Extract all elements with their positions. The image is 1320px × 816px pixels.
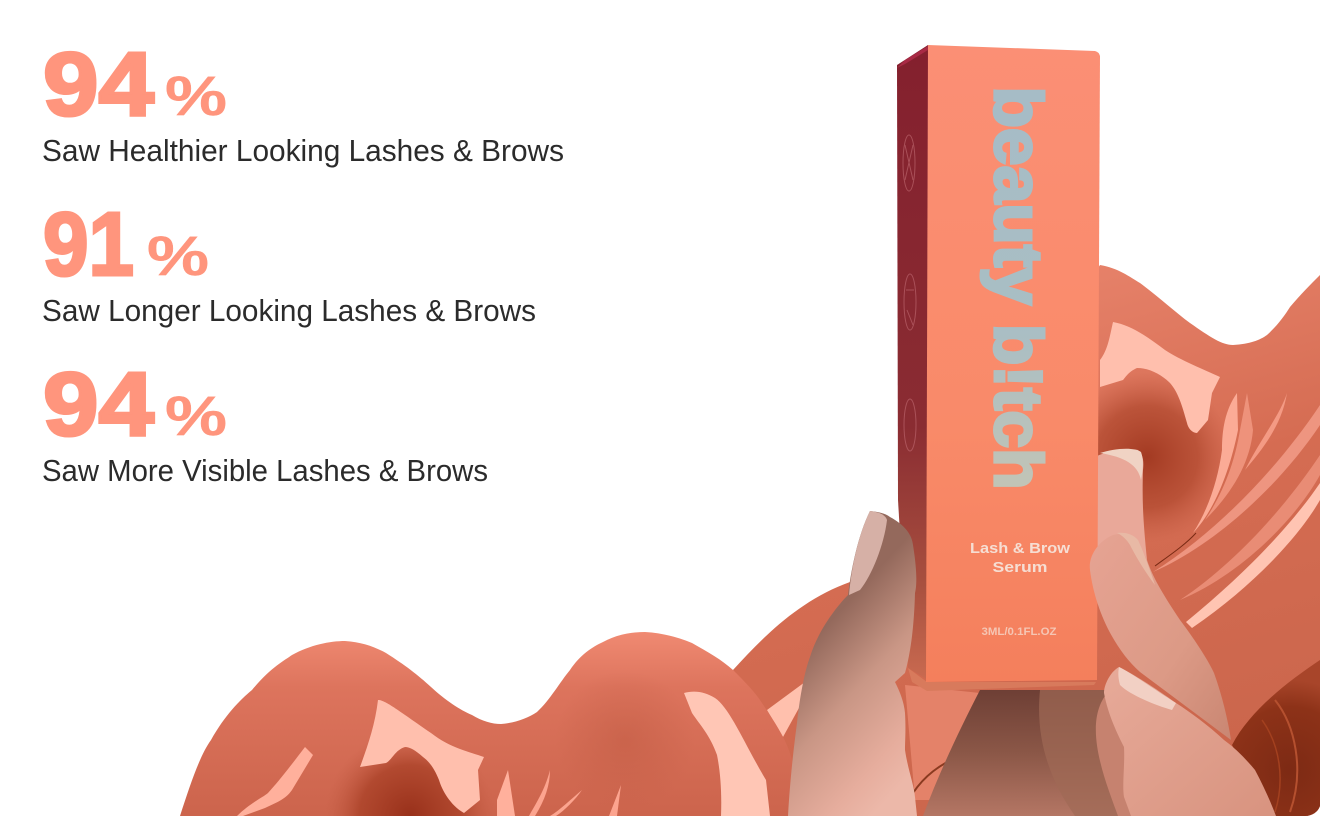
box side panel [897, 45, 928, 680]
palm [923, 690, 1135, 816]
thumb nail [849, 511, 887, 595]
ring finger [1096, 690, 1235, 816]
stat block 2: 91% longer [42, 195, 536, 328]
caption: Saw Healthier Looking Lashes & Brows [42, 133, 564, 168]
big number 91: 91 [43, 195, 134, 295]
big number 94: 94 [43, 355, 154, 455]
product type: Serum [992, 560, 1048, 576]
middle nail [1117, 533, 1155, 585]
hand holding the box [923, 449, 1235, 816]
ring finger shadow [1039, 690, 1135, 816]
big number 94: 94 [43, 35, 154, 135]
index nail [1100, 449, 1143, 480]
caption: Saw More Visible Lashes & Brows [42, 453, 488, 488]
side panel icons [903, 135, 916, 451]
stat block 3: 94% more visible [42, 355, 488, 488]
stat block 1: 94% healthier [42, 35, 564, 168]
index finger behind box [1090, 449, 1147, 560]
brand name foil: beauty b!tch [980, 86, 1056, 490]
caption: Saw Longer Looking Lashes & Brows [42, 293, 536, 328]
percent sign: % [147, 224, 209, 287]
back liquid wave, right side [733, 265, 1320, 816]
fingers in front of box [788, 511, 1276, 816]
middle finger [1090, 534, 1231, 740]
thumb [788, 511, 917, 816]
little finger nail [1118, 667, 1176, 710]
volume: 3ML/0.1FL.OZ [982, 626, 1057, 638]
little finger [1104, 667, 1276, 816]
side top flap [897, 46, 928, 68]
box front face [926, 45, 1100, 682]
front liquid wave, left side [180, 632, 794, 816]
percent sign: % [165, 64, 227, 127]
box bottom flap [908, 668, 1096, 691]
product box [897, 45, 1100, 691]
product name: Lash & Brow [970, 541, 1071, 557]
percent sign: % [165, 384, 227, 447]
